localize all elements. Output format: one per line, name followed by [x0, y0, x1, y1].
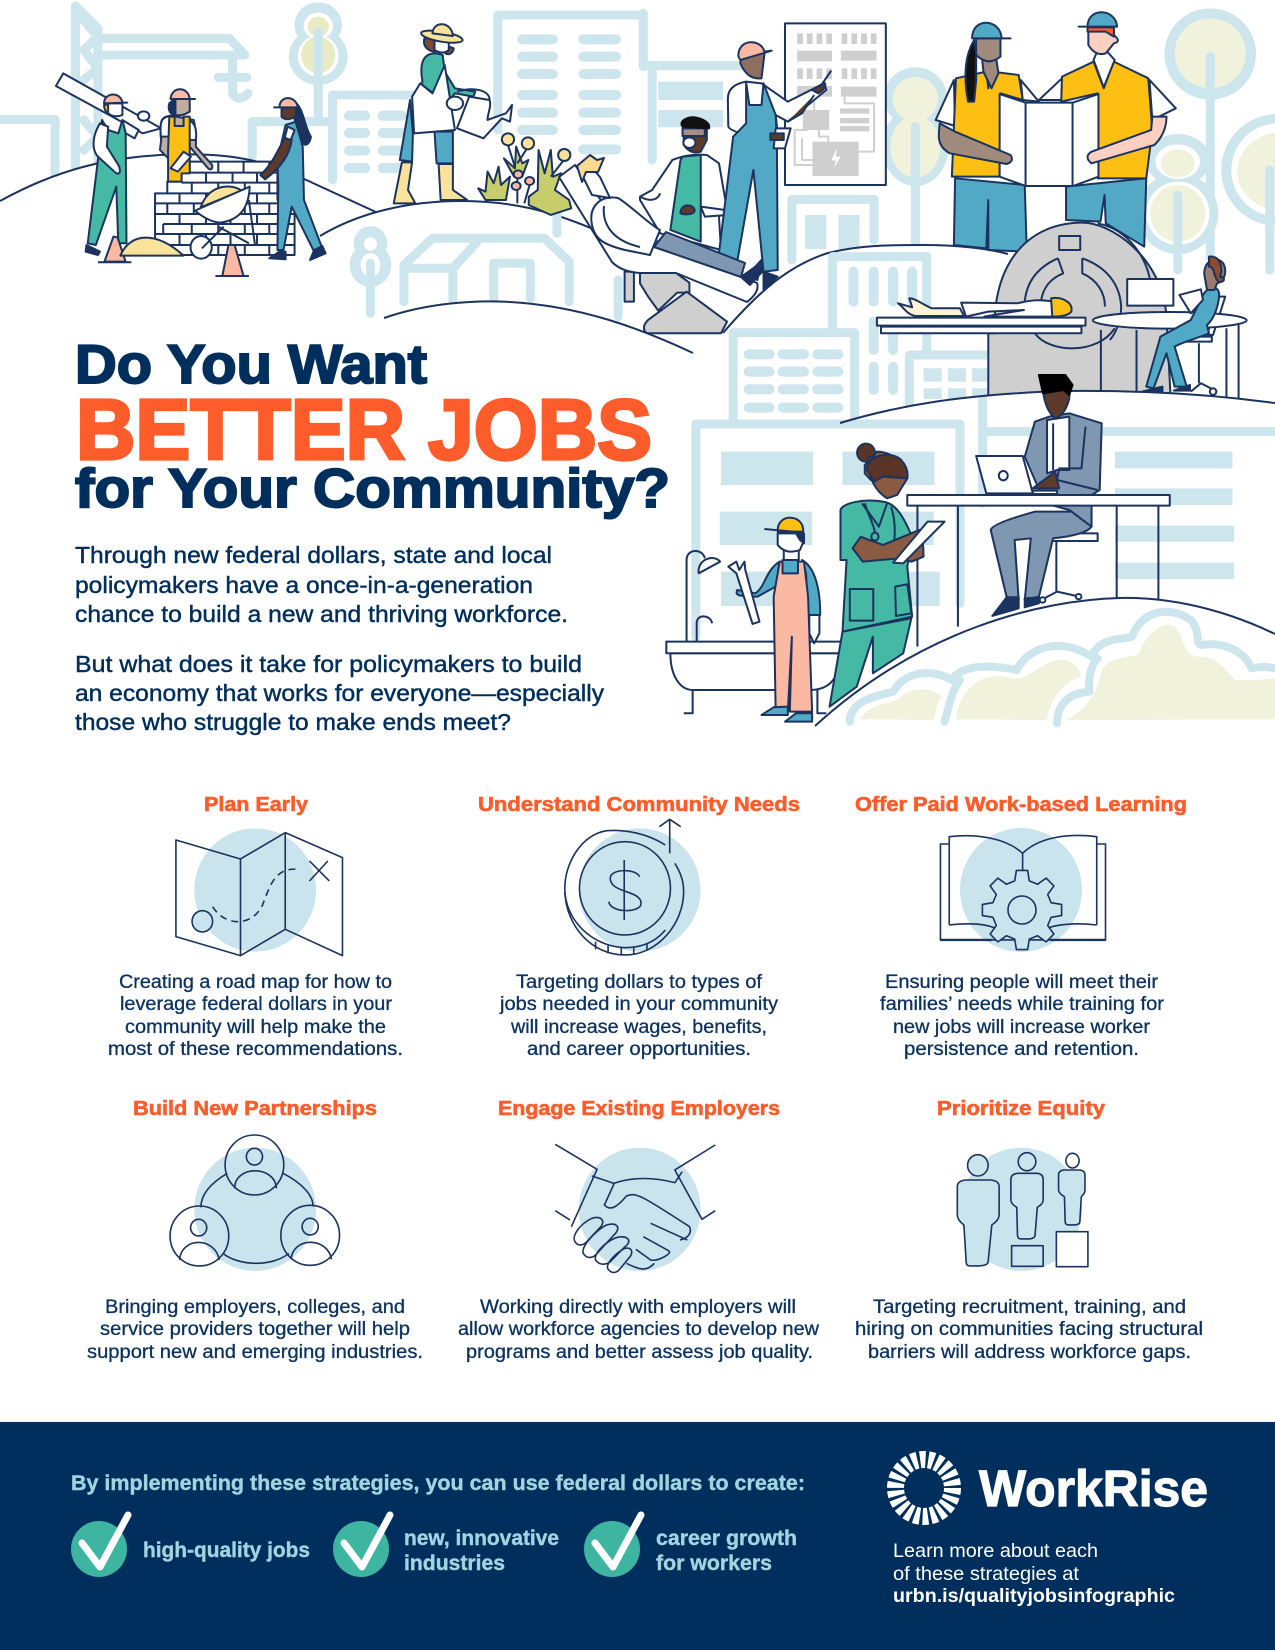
- description: Targeting dollars to types of: [516, 971, 763, 993]
- intro text: policymakers have a once-in-a-generation: [75, 572, 533, 598]
- intro text: those who struggle to make ends meet?: [75, 709, 511, 735]
- hill: front right hill with bushes: [815, 598, 1275, 726]
- intro text: But what does it take for policymakers to build: [75, 651, 582, 677]
- intro text: Through new federal dollars, state and local: [75, 542, 552, 568]
- description: new jobs will increase worker: [893, 1016, 1151, 1038]
- beam: [56, 73, 161, 133]
- businessman at laptop: [991, 375, 1102, 616]
- background: lower buildings: [733, 257, 988, 422]
- worker: dentist: [640, 117, 727, 250]
- background: left city skyline: [0, 2, 640, 180]
- logo: WorkRise: WorkRise: [979, 1460, 1208, 1517]
- background: right city skyline and trees: [643, 8, 1275, 270]
- callout heading: By implementing these strategies, you can use federal dollars to create:: [71, 1472, 805, 1495]
- description: [499, 971, 778, 1060]
- description: Working directly with employers will: [480, 1296, 796, 1318]
- panel: offer paid work-based learning: [855, 794, 1187, 1060]
- description: community will help make the: [125, 1016, 386, 1038]
- benefit: career growth: [584, 1515, 797, 1577]
- icon: background tree: [289, 2, 348, 118]
- icon: background trees: [882, 8, 1275, 270]
- worker: plumber: [728, 518, 820, 722]
- blueprint board: [785, 23, 886, 185]
- description: allow workforce agencies to develop new: [458, 1318, 820, 1340]
- dental chair base: [625, 272, 727, 333]
- benefit: high-quality jobs: [71, 1515, 310, 1577]
- description: Targeting recruitment, training, and: [873, 1296, 1186, 1318]
- description: [458, 1296, 820, 1363]
- description: [880, 971, 1165, 1060]
- description: and career opportunities.: [527, 1038, 751, 1060]
- plants: [478, 133, 571, 215]
- illustration: hero city scene with workers: [0, 2, 1275, 726]
- table and patient: [877, 298, 1086, 333]
- worker: nurse: [830, 444, 945, 707]
- sand pile: [120, 238, 184, 256]
- background windows: [658, 82, 860, 249]
- heading: Build New Partnerships: [133, 1098, 377, 1120]
- description: [108, 971, 403, 1060]
- worker: engineer with blueprint: [719, 23, 886, 290]
- icon: coin: [565, 819, 701, 955]
- benefit: career growth: career growth: [656, 1527, 797, 1550]
- title: Do You Want: [75, 333, 427, 395]
- worker: yellow apron: [160, 89, 212, 182]
- title: [75, 333, 670, 519]
- traffic cone: [104, 237, 126, 262]
- workers: lower scene in office, clinic and bathroom: [666, 375, 1170, 722]
- link text: of these strategies at: [893, 1563, 1080, 1585]
- machine: MRI scanner with patient and technician: [877, 223, 1247, 400]
- hill line: middle hill: [723, 245, 1008, 333]
- background: large lower buildings: [696, 398, 1275, 637]
- benefit: new industries: [333, 1515, 559, 1577]
- benefit: high-quality jobs: high-quality jobs: [143, 1539, 310, 1562]
- heading: Plan Early: [204, 794, 309, 816]
- worker: blue overalls: [260, 98, 326, 260]
- title: for Your Community?: [75, 457, 670, 519]
- icon: people on boxes: [957, 1148, 1088, 1271]
- intro text: [75, 542, 605, 735]
- panel: build new partnerships: [87, 1098, 423, 1363]
- icon: connected people: [170, 1135, 340, 1271]
- intro text: chance to build a new and thriving workforce.: [75, 601, 568, 627]
- description: persistence and retention.: [904, 1038, 1139, 1060]
- heading: Prioritize Equity: [937, 1098, 1106, 1120]
- hill: middle right hill: [723, 245, 1275, 440]
- description: service providers together will help: [100, 1318, 410, 1340]
- heading: Engage Existing Employers: [498, 1098, 780, 1120]
- worker: green overalls: [86, 94, 149, 255]
- link text: Learn more about each: [893, 1540, 1098, 1562]
- laptop: [976, 456, 1059, 494]
- benefit: career growth: for workers: [656, 1552, 772, 1575]
- description: most of these recommendations.: [108, 1038, 403, 1060]
- title: BETTER JOBS: [76, 383, 652, 478]
- workers: engineers holding a plan: [936, 12, 1176, 252]
- description: hiring on communities facing structural: [855, 1318, 1203, 1340]
- background: small house and tree: [354, 203, 618, 317]
- description: leverage federal dollars in your: [120, 993, 393, 1015]
- panel: understand community needs: [478, 794, 800, 1060]
- dental chair: [559, 165, 758, 302]
- benefit: new industries: industries: [404, 1552, 505, 1575]
- panel: prioritize equity: [855, 1098, 1203, 1363]
- traffic cone: [222, 245, 244, 276]
- icon: handshake: [555, 1144, 715, 1272]
- workers: bricklayers group: [56, 73, 326, 276]
- description: will increase wages, benefits,: [510, 1016, 767, 1038]
- patient reclining: [577, 155, 762, 285]
- panel: engage existing employers: [458, 1098, 820, 1363]
- icon: map: [176, 828, 342, 956]
- intro text: an economy that works for everyone—especially: [75, 680, 605, 706]
- description: jobs needed in your community: [499, 993, 778, 1015]
- hills: upper left hills: [0, 154, 640, 300]
- bathtub: [666, 551, 848, 713]
- link text: [893, 1540, 1175, 1607]
- description: Bringing employers, colleges, and: [105, 1296, 405, 1318]
- desk: [917, 506, 1158, 647]
- description: programs and better assess job quality.: [466, 1341, 813, 1363]
- hill: lower right hill and building: [840, 391, 1275, 720]
- description: [855, 1296, 1203, 1363]
- description: support new and emerging industries.: [87, 1341, 423, 1363]
- hill: title hill line: [384, 301, 693, 353]
- description: Ensuring people will meet their: [885, 971, 1159, 993]
- benefit: new industries: new, innovative: [404, 1527, 559, 1550]
- heading: Understand Community Needs: [478, 794, 800, 816]
- icon: book and gear: [940, 828, 1106, 952]
- brick wall: [155, 162, 295, 255]
- description: barriers will address workforce gaps.: [868, 1341, 1191, 1363]
- worker: gardener with plants: [394, 24, 571, 215]
- panel: footer band: [0, 1422, 1275, 1650]
- background: bushes: [850, 612, 1275, 723]
- heading: Offer Paid Work-based Learning: [855, 794, 1187, 816]
- description: families’ needs while training for: [880, 993, 1165, 1015]
- link text: urbn.is/qualityjobsinfographic: [893, 1585, 1175, 1607]
- wheelbarrow: [191, 186, 255, 259]
- description: Creating a road map for how to: [119, 971, 392, 993]
- panel: plan early: [108, 794, 403, 1060]
- description: [87, 1296, 423, 1363]
- desk and technician: [1093, 257, 1247, 400]
